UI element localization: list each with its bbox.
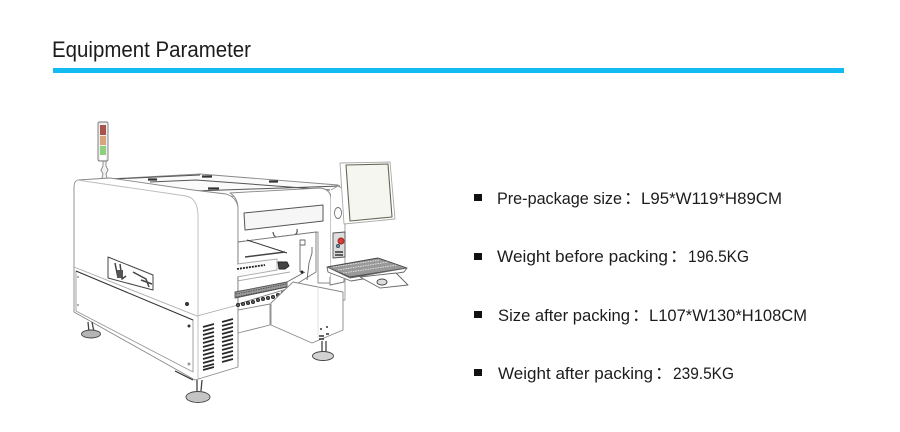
parameter: weight before packing [474, 247, 749, 266]
parameter: weight after packing: Weight after packing [498, 364, 653, 383]
parameter: weight after packing [474, 364, 734, 383]
parameter: size after packing [474, 306, 807, 325]
parameter: weight before packing: 196.5KG [688, 247, 749, 266]
parameter: weight after packing: ： [655, 364, 672, 383]
ventilation slots [203, 319, 233, 370]
side access window [108, 257, 153, 290]
lower front panel [76, 271, 193, 380]
signal light tower [98, 122, 114, 182]
parameter: pre-package size [474, 189, 782, 208]
parameter: size after packing: ： [632, 306, 649, 325]
feeder row [236, 291, 285, 307]
control panel [333, 232, 345, 258]
parameter: pre-package size: Pre-package size [497, 189, 622, 208]
work area and placement head [235, 232, 316, 304]
parameter: pre-package size: ： [624, 189, 641, 208]
parameter: pre-package size: L95*W119*H89CM [641, 189, 782, 208]
parameter: weight before packing: Weight before packing [497, 247, 668, 266]
title underline bar [53, 68, 844, 73]
monitor [334, 162, 395, 224]
title: Equipment Parameter [52, 37, 251, 62]
parameter: weight after packing: 239.5KG [673, 364, 734, 383]
parameter: size after packing: L107*W130*H108CM [649, 306, 807, 325]
parameter: weight before packing: ： [670, 247, 687, 266]
parameter: size after packing: Size after packing [498, 306, 630, 325]
keyboard tray [327, 258, 407, 285]
levelling feet [82, 322, 334, 402]
front upper housing [230, 186, 345, 300]
illustration: pick and place machine [74, 122, 408, 402]
left cabinet [74, 178, 238, 380]
machine top cover [108, 174, 340, 197]
parameter list [474, 189, 807, 383]
pedestal cabinet [271, 282, 343, 343]
lower centre tray [238, 304, 270, 333]
mouse tray [360, 273, 408, 288]
